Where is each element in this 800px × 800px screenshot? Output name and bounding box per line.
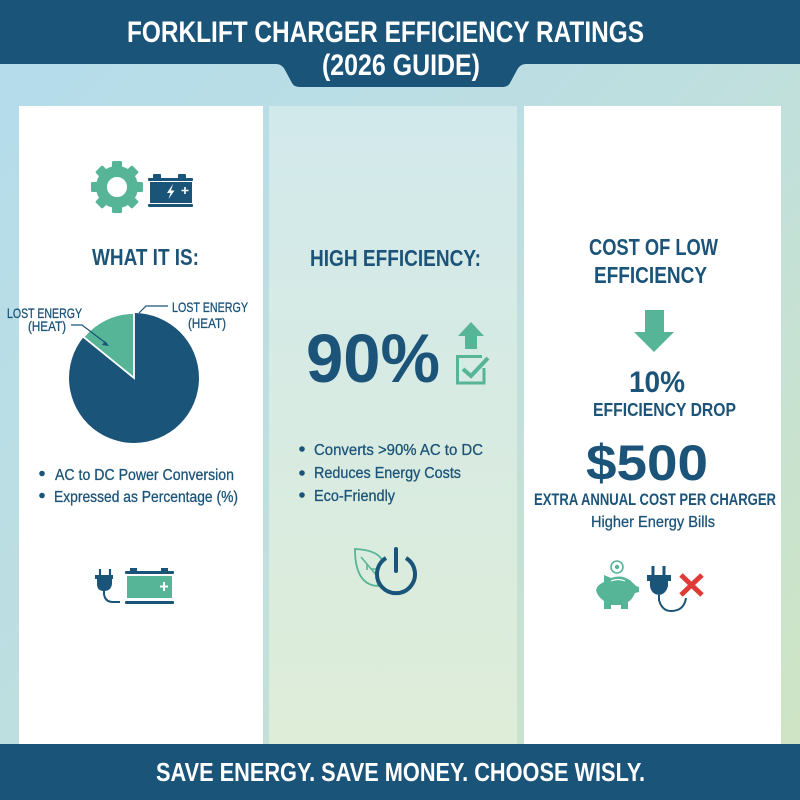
label: lost energy right: LOST ENERGY: [172, 299, 249, 315]
footer text: SAVE ENERGY. SAVE MONEY. CHOOSE WISLY.: [156, 757, 645, 787]
bullet list: high efficiency: Converts >90% AC to DC: [314, 442, 483, 459]
heading: cost of low efficiency: COST OF LOW: [589, 234, 718, 260]
bullet list: what it is: AC to DC Power Conversion: [55, 467, 234, 484]
icon: battery: [148, 174, 193, 207]
label: higher energy bills: Higher Energy Bills: [591, 514, 715, 531]
icon: leaf and power: [355, 549, 415, 593]
label: lost energy right: [139, 299, 249, 331]
icon: up arrow: [458, 322, 484, 349]
panel: cost of low efficiency: [524, 106, 781, 744]
label: lost energy left: [7, 305, 109, 346]
panel: high efficiency: [269, 106, 517, 744]
label: efficiency drop: EFFICIENCY DROP: [593, 400, 736, 420]
icon: checkbox: [458, 356, 488, 383]
label: lost energy left: (HEAT): [28, 318, 66, 334]
bullet list: high efficiency: Eco-Friendly: [314, 488, 395, 505]
stat: 10%: 10%: [629, 366, 685, 399]
heading: high efficiency: HIGH EFFICIENCY:: [310, 245, 481, 271]
title: [127, 16, 644, 82]
title: (2026 GUIDE): [322, 49, 480, 82]
header banner: [0, 0, 800, 87]
bullet list: high efficiency: [299, 442, 483, 505]
heading: cost of low efficiency: [589, 234, 718, 288]
title: FORKLIFT CHARGER EFFICIENCY RATINGS: [127, 16, 644, 49]
stat: $500: $500: [586, 435, 708, 491]
bullet list: what it is: Expressed as Percentage (%): [54, 489, 238, 506]
icon: piggy bank: [596, 561, 639, 609]
label: lost energy left: LOST ENERGY: [7, 305, 82, 321]
heading: what it is: WHAT IT IS:: [92, 244, 199, 270]
icon: gear: [91, 161, 143, 213]
icon: plug and battery: [95, 568, 174, 604]
stat: 90%: 90%: [306, 320, 440, 397]
icon: plug with cross: [647, 566, 702, 611]
panel: what it is: [7, 106, 263, 744]
footer banner: [0, 744, 800, 800]
pie chart: [69, 313, 199, 443]
bullet list: high efficiency: Reduces Energy Costs: [314, 465, 461, 482]
bullet list: what it is: [39, 467, 238, 506]
heading: cost of low efficiency: EFFICIENCY: [594, 262, 707, 288]
label: lost energy right: (HEAT): [188, 315, 226, 331]
icon: down arrow: [634, 310, 674, 352]
